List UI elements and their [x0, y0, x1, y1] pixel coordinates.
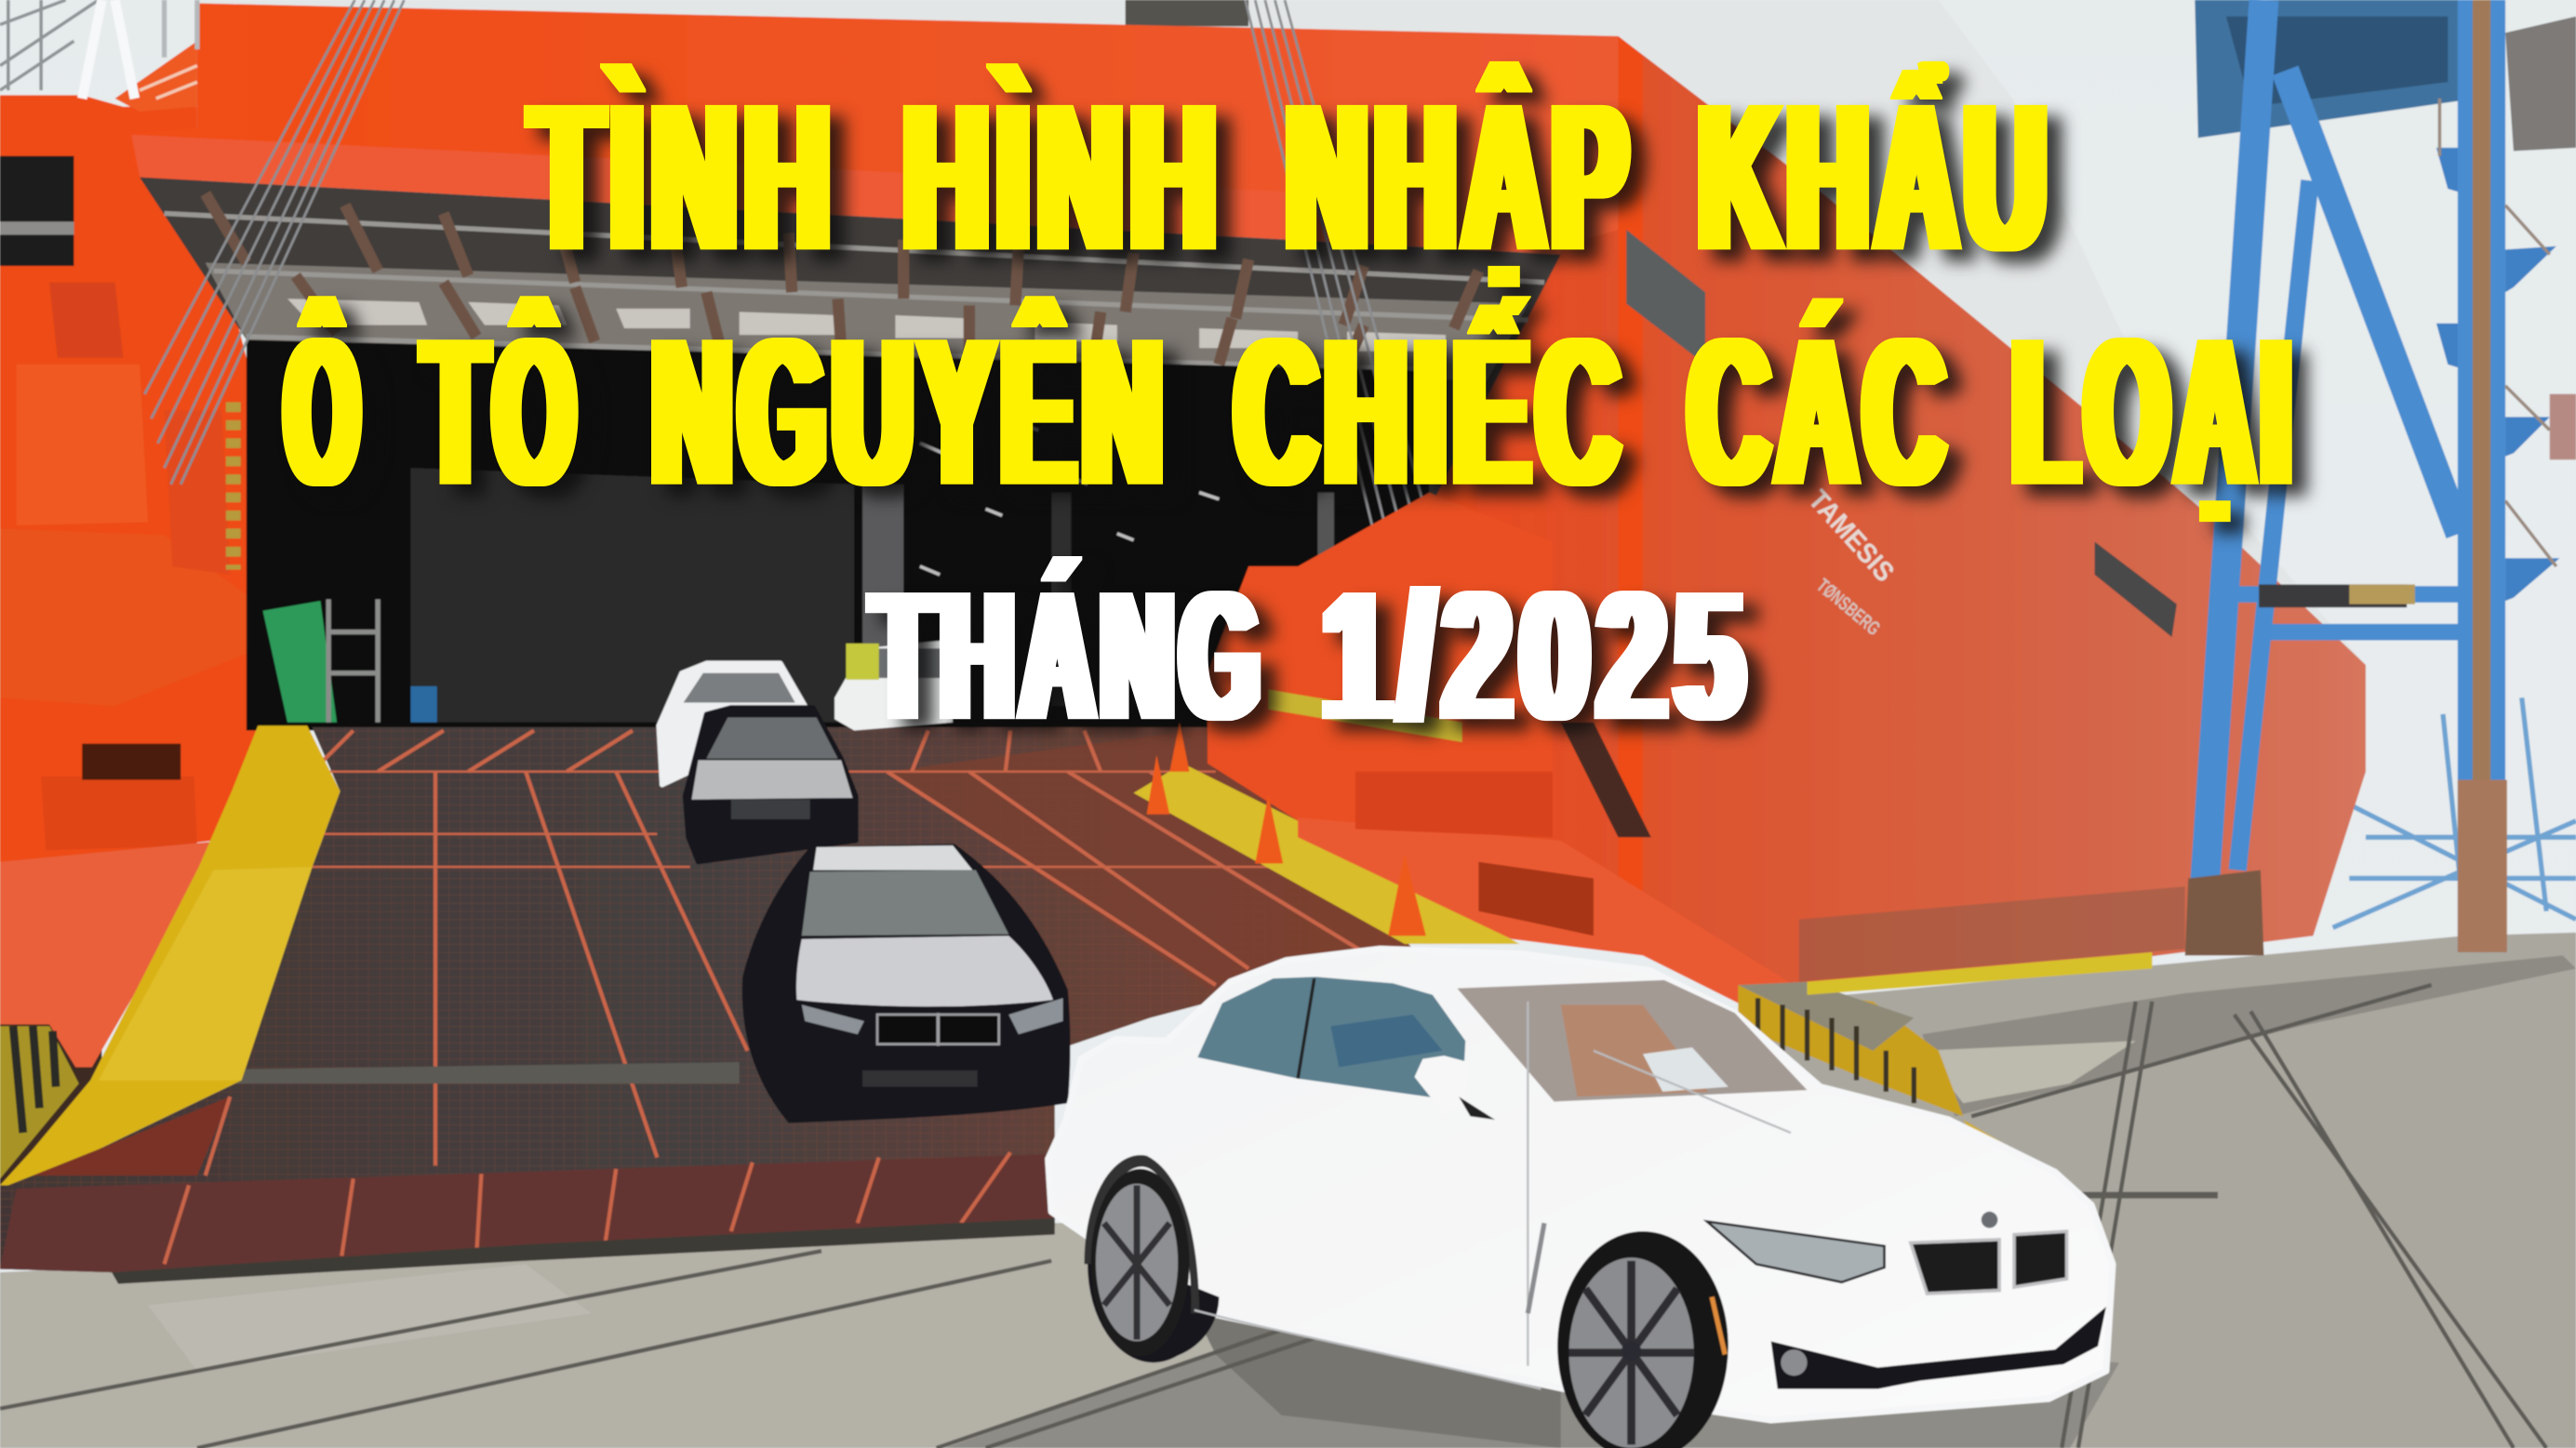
- green tarp and forklift: [263, 599, 437, 723]
- rail tracks on the quay: [0, 985, 2546, 1448]
- far white car: [834, 640, 953, 731]
- lower intake: [1771, 1307, 2106, 1388]
- black car 2: [742, 844, 1071, 1123]
- side mirror: [1414, 1056, 1469, 1116]
- yellow barrier near white car: [1738, 952, 2152, 1195]
- concrete quay lower left: [0, 1223, 1808, 1448]
- title line 3: month: THÁNG: [873, 552, 1267, 758]
- deck hatch on top of ship: [1126, 0, 1248, 26]
- grille: [1911, 1240, 1999, 1294]
- vehicle ramp: [0, 727, 1413, 1283]
- concrete quay right: [1742, 933, 2576, 1448]
- title line 1: [530, 59, 2053, 294]
- title line 1: KHẨU: [1699, 59, 2053, 294]
- title line 1: TÌNH: [530, 59, 838, 294]
- ship white superstructure: [197, 0, 2366, 706]
- dark interior of the ship: [247, 339, 1429, 731]
- title line 2: [286, 294, 2299, 529]
- windshield: [1457, 980, 1808, 1102]
- door ceiling structure: [140, 178, 1561, 509]
- ship hull right: TØNSBERG: [1812, 575, 1884, 640]
- white railing and stairs: [0, 0, 197, 112]
- yellow and black bollard left: [0, 1026, 79, 1178]
- title line 2: CÁC: [1688, 294, 1952, 529]
- suspended cables: [144, 0, 1429, 558]
- worker in hi-vis vest: [846, 644, 879, 680]
- ship hull right: TAMESIS: [1802, 485, 1900, 588]
- yellow strip left: [0, 725, 340, 1186]
- blue port crane: [2185, 0, 2576, 955]
- title line 1: HÌNH: [903, 59, 1224, 294]
- light pavement slab: [1922, 1041, 2136, 1103]
- black car 1: [685, 708, 856, 862]
- left orange tower: [0, 95, 260, 865]
- headlight: [1707, 1221, 1885, 1282]
- title line 2: Ô: [286, 294, 365, 529]
- upper orange band of ship: [131, 4, 1618, 246]
- title line 2: CHIẾC: [1235, 294, 1626, 529]
- title: [286, 59, 2299, 758]
- asphalt bottom centre: [944, 1330, 2119, 1448]
- left dark base: [0, 985, 101, 1190]
- rear wheel arch and wheel: [1085, 1155, 1199, 1313]
- white car behind: [659, 663, 805, 785]
- ramp slab left: [0, 841, 223, 1067]
- rear tyre bottom: [1141, 1283, 1219, 1361]
- orange ramp machinery: [1134, 493, 1799, 1004]
- distant cranes: [2333, 697, 2576, 927]
- light concrete patch: [148, 1264, 592, 1371]
- body creases: [1195, 1002, 1791, 1388]
- white BMW foreground car: [1048, 949, 2113, 1448]
- ship hull right: [1429, 36, 2366, 995]
- shadow under white car: [1191, 1305, 1561, 1448]
- front wheel: [1557, 1231, 1728, 1448]
- traffic cones: [1147, 723, 1426, 936]
- title line 2: NGUYÊN: [652, 294, 1169, 529]
- title line 3: month: 1/2025: [1323, 552, 1753, 758]
- title line 2: TÔ: [424, 294, 581, 529]
- title line 1: NHẬP: [1287, 59, 1635, 294]
- title line 2: LOẠI: [2012, 294, 2299, 529]
- side window: [1197, 976, 1465, 1102]
